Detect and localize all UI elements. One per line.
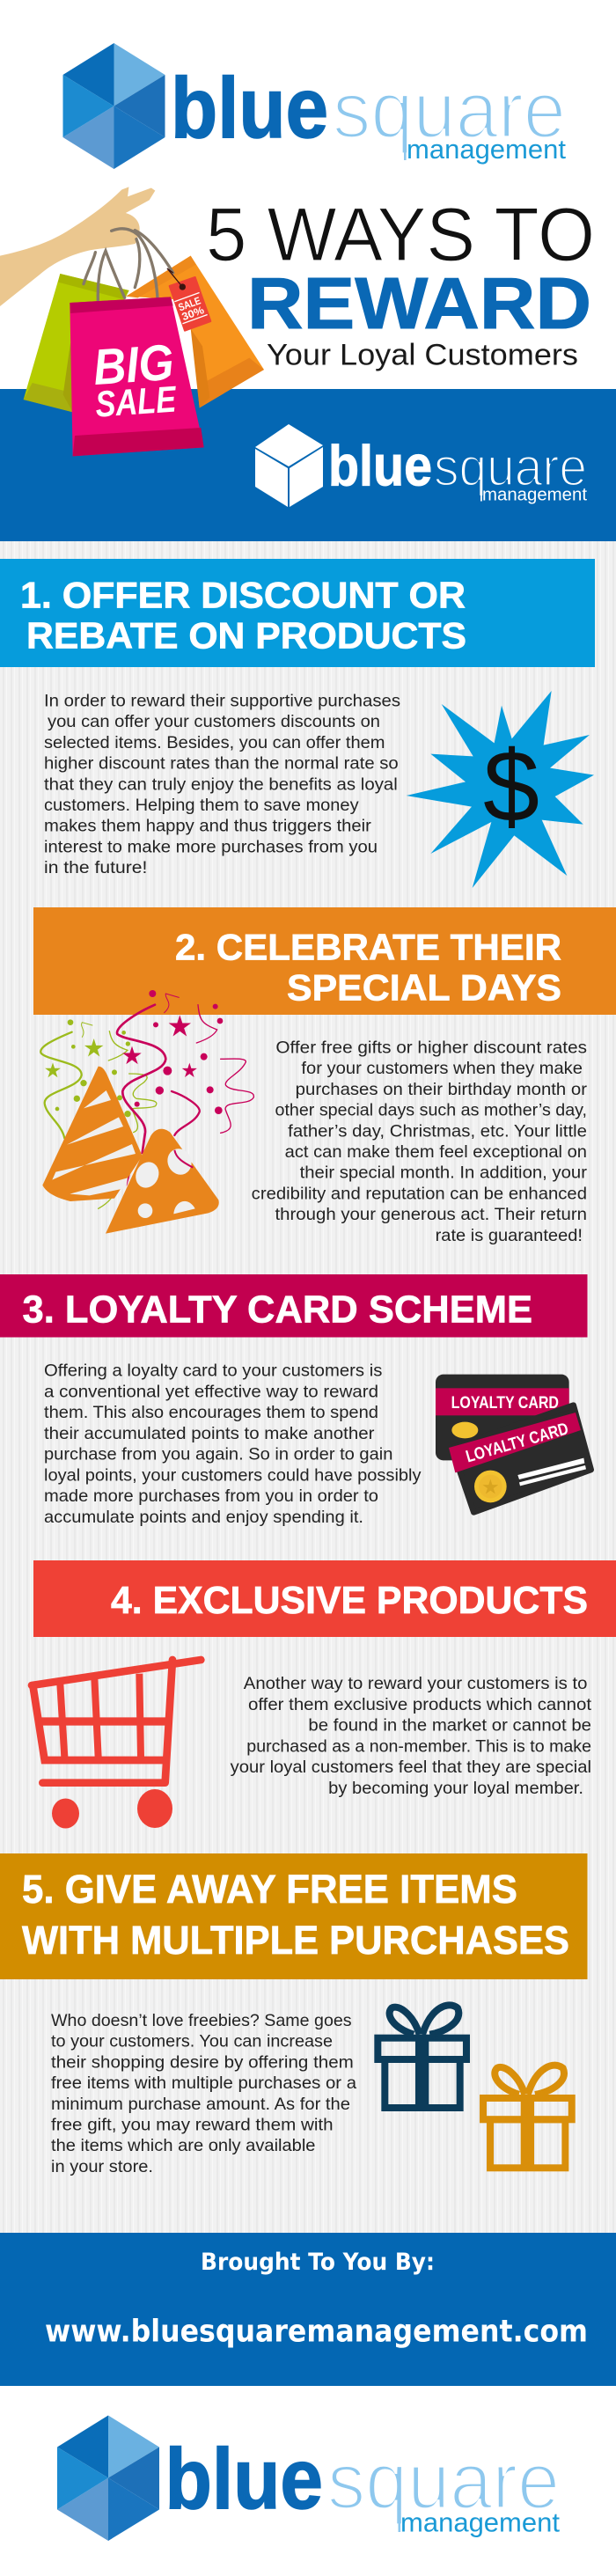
icon: loyalty cards: [436, 1375, 591, 1512]
logo word: blue: blue: [171, 60, 328, 156]
heading band 1: REBATE ON PRODUCTS: [26, 614, 466, 657]
text block 3: accumulate points and enjoy spending it.: [44, 1508, 363, 1527]
heading band 1: [0, 559, 595, 667]
logo word: q descender: [398, 2521, 400, 2532]
text block 5: free items with multiple purchases or a: [51, 2073, 356, 2093]
text block 1: you can offer your customers discounts on: [48, 712, 380, 731]
heading band 3: [0, 1274, 588, 1338]
text block 2: Offer free gifts or higher discount rates: [275, 1038, 587, 1058]
text block 5: free gift, you may reward them with: [51, 2116, 334, 2135]
text block 1: makes them happy and thus triggers their: [44, 817, 371, 836]
sale tag: [167, 268, 210, 331]
icon: white cube: [255, 424, 323, 507]
text block 4: [231, 1674, 592, 1798]
text block 3: purchase from you again. So in order to gain: [44, 1445, 392, 1464]
title line: 5 ways to: 5 WAYS TO: [206, 193, 595, 277]
shopping bags: [24, 229, 264, 456]
logo word: blue: blue: [165, 2431, 323, 2527]
text block 2: father’s day, Christmas, etc. Your little: [288, 1121, 587, 1141]
logo word: q descender: [404, 150, 407, 160]
text block 3: made more purchases from you in order to: [44, 1486, 378, 1506]
text block 4: be found in the market or cannot be: [308, 1716, 591, 1736]
text block 4: offer them exclusive products which cannot: [248, 1695, 592, 1714]
icon: starburst with dollar sign: [407, 691, 594, 888]
sale tag: 30%: [180, 304, 206, 323]
heading band 4: [33, 1560, 616, 1637]
text block 3: a conventional yet effective way to reward: [44, 1382, 378, 1401]
panel: section 4 exclusive products: [32, 1560, 616, 1829]
text block 2: rate is guaranteed!: [436, 1226, 583, 1245]
panel: section 5 free items: [0, 1853, 588, 2176]
bottom logo: [57, 2415, 560, 2541]
logo word: square: square: [327, 2437, 560, 2526]
logo word: management: management: [400, 2506, 560, 2538]
icon: navy gift: [378, 2005, 466, 2108]
orange bag: [126, 256, 264, 407]
text block 4: by becoming your loyal member.: [328, 1779, 583, 1798]
footer text: brought to you by: Brought To You By:: [201, 2249, 435, 2276]
text block 5: the items which are only available: [51, 2136, 315, 2155]
heading band 2: [33, 907, 616, 1015]
icon: starburst with dollar sign: $: [483, 730, 539, 843]
icon: shopping cart: [32, 1660, 201, 1829]
title line: your loyal customers: Your Loyal Customers: [267, 338, 578, 371]
text block 2: for your customers when they make: [301, 1059, 583, 1078]
text block 1: interest to make more purchases from you: [44, 837, 378, 856]
illustration: hand holding shopping bags: [0, 187, 264, 456]
logo word: q descender: [480, 493, 482, 502]
back card: LOYALTY CARD: [451, 1394, 559, 1413]
magenta streamers and stars: [117, 990, 253, 1185]
text block 1: [44, 692, 400, 877]
text block 2: their special month. In addition, your: [300, 1163, 588, 1183]
bag handles: [84, 229, 173, 306]
title line: reward: REWARD: [247, 262, 591, 344]
text block 5: to your customers. You can increase: [51, 2032, 333, 2051]
text block 2: purchases on their birthday month or: [296, 1080, 588, 1099]
panel: footer credits: [0, 2233, 616, 2386]
back card: [436, 1375, 569, 1460]
text block 1: in the future!: [44, 858, 147, 877]
bag text: sale: SALE: [94, 378, 178, 425]
text block 1: selected items. Besides, you can offer them: [44, 733, 385, 752]
green bag: [24, 274, 129, 412]
text block 4: your loyal customers feel that they are special: [231, 1758, 591, 1777]
text block 1: that they can truly enjoy the benefits as loyal: [44, 774, 398, 794]
green streamers and stars: [40, 1019, 157, 1208]
text block 2: through your generous act. Their return: [275, 1205, 587, 1224]
text block 2: [252, 1038, 588, 1245]
text block 5: in your store.: [51, 2157, 153, 2176]
panel: section 1 discount: [0, 559, 595, 888]
icon: orange gift: [483, 2066, 572, 2168]
heading band 2: 2. CELEBRATE THEIR: [175, 926, 561, 968]
illustration: party hats and streamers: [40, 990, 253, 1234]
text block 5: Who doesn’t love freebies? Same goes: [51, 2011, 352, 2030]
icon: hexagon cube: [63, 43, 165, 169]
logo word: square: square: [333, 66, 566, 155]
heading band 4: 4. EXCLUSIVE PRODUCTS: [111, 1579, 588, 1622]
pink bag: [70, 297, 204, 456]
text block 3: loyal points, your customers could have possibly: [44, 1465, 422, 1485]
blue header band: [0, 389, 616, 541]
heading band 3: 3. LOYALTY CARD SCHEME: [23, 1288, 532, 1331]
heading band 5: WITH MULTIPLE PURCHASES: [22, 1918, 569, 1963]
title: [206, 193, 595, 371]
logo word: square: square: [434, 437, 587, 496]
bag text: big: BIG: [92, 334, 176, 396]
front card: LOYALTY CARD: [464, 1420, 570, 1466]
text block 5: minimum purchase amount. As for the: [51, 2095, 350, 2114]
text block 1: In order to reward their supportive purchases: [44, 692, 400, 711]
white logo on blue band: [255, 424, 587, 507]
heading band 5: [0, 1853, 588, 1979]
logo word: blue: blue: [328, 433, 432, 498]
front card: [449, 1405, 591, 1512]
text block 2: credibility and reputation can be enhanced: [252, 1184, 587, 1203]
logo word: management: management: [407, 134, 566, 165]
heading band 2: SPECIAL DAYS: [287, 966, 561, 1009]
text block 2: other special days such as mother’s day,: [275, 1101, 587, 1120]
text block 4: purchased as a non-member. This is to make: [246, 1736, 591, 1756]
text block 3: their accumulated points to make another: [44, 1424, 375, 1443]
text block 1: customers. Helping them to save money: [44, 796, 359, 815]
text block 3: them. This also encourages them to spend: [44, 1403, 378, 1422]
text block 5: their shopping desire by offering them: [51, 2052, 354, 2072]
party hat: dotted: [106, 1129, 219, 1234]
text block 2: act can make them feel exceptional on: [285, 1142, 587, 1162]
text block 1: higher discount rates than the normal rate so: [44, 754, 399, 774]
text block 3: [44, 1361, 422, 1527]
panel: section 3 loyalty card: [0, 1274, 591, 1527]
logo word: management: management: [482, 484, 587, 505]
icon: hand: [0, 187, 155, 306]
party hat: striped: [42, 1067, 143, 1201]
sale tag: SALE: [177, 294, 202, 313]
icon: hexagon cube: [57, 2415, 159, 2541]
top logo: [63, 43, 566, 169]
text block 4: Another way to reward your customers is to: [244, 1674, 588, 1693]
text block 3: Offering a loyalty card to your customers is: [44, 1361, 383, 1381]
text block 5: [51, 2011, 356, 2176]
heading band 1: 1. OFFER DISCOUNT OR: [20, 574, 466, 616]
panel: section 2 special days: [33, 907, 616, 1245]
heading band 5: 5. GIVE AWAY FREE ITEMS: [22, 1867, 517, 1912]
